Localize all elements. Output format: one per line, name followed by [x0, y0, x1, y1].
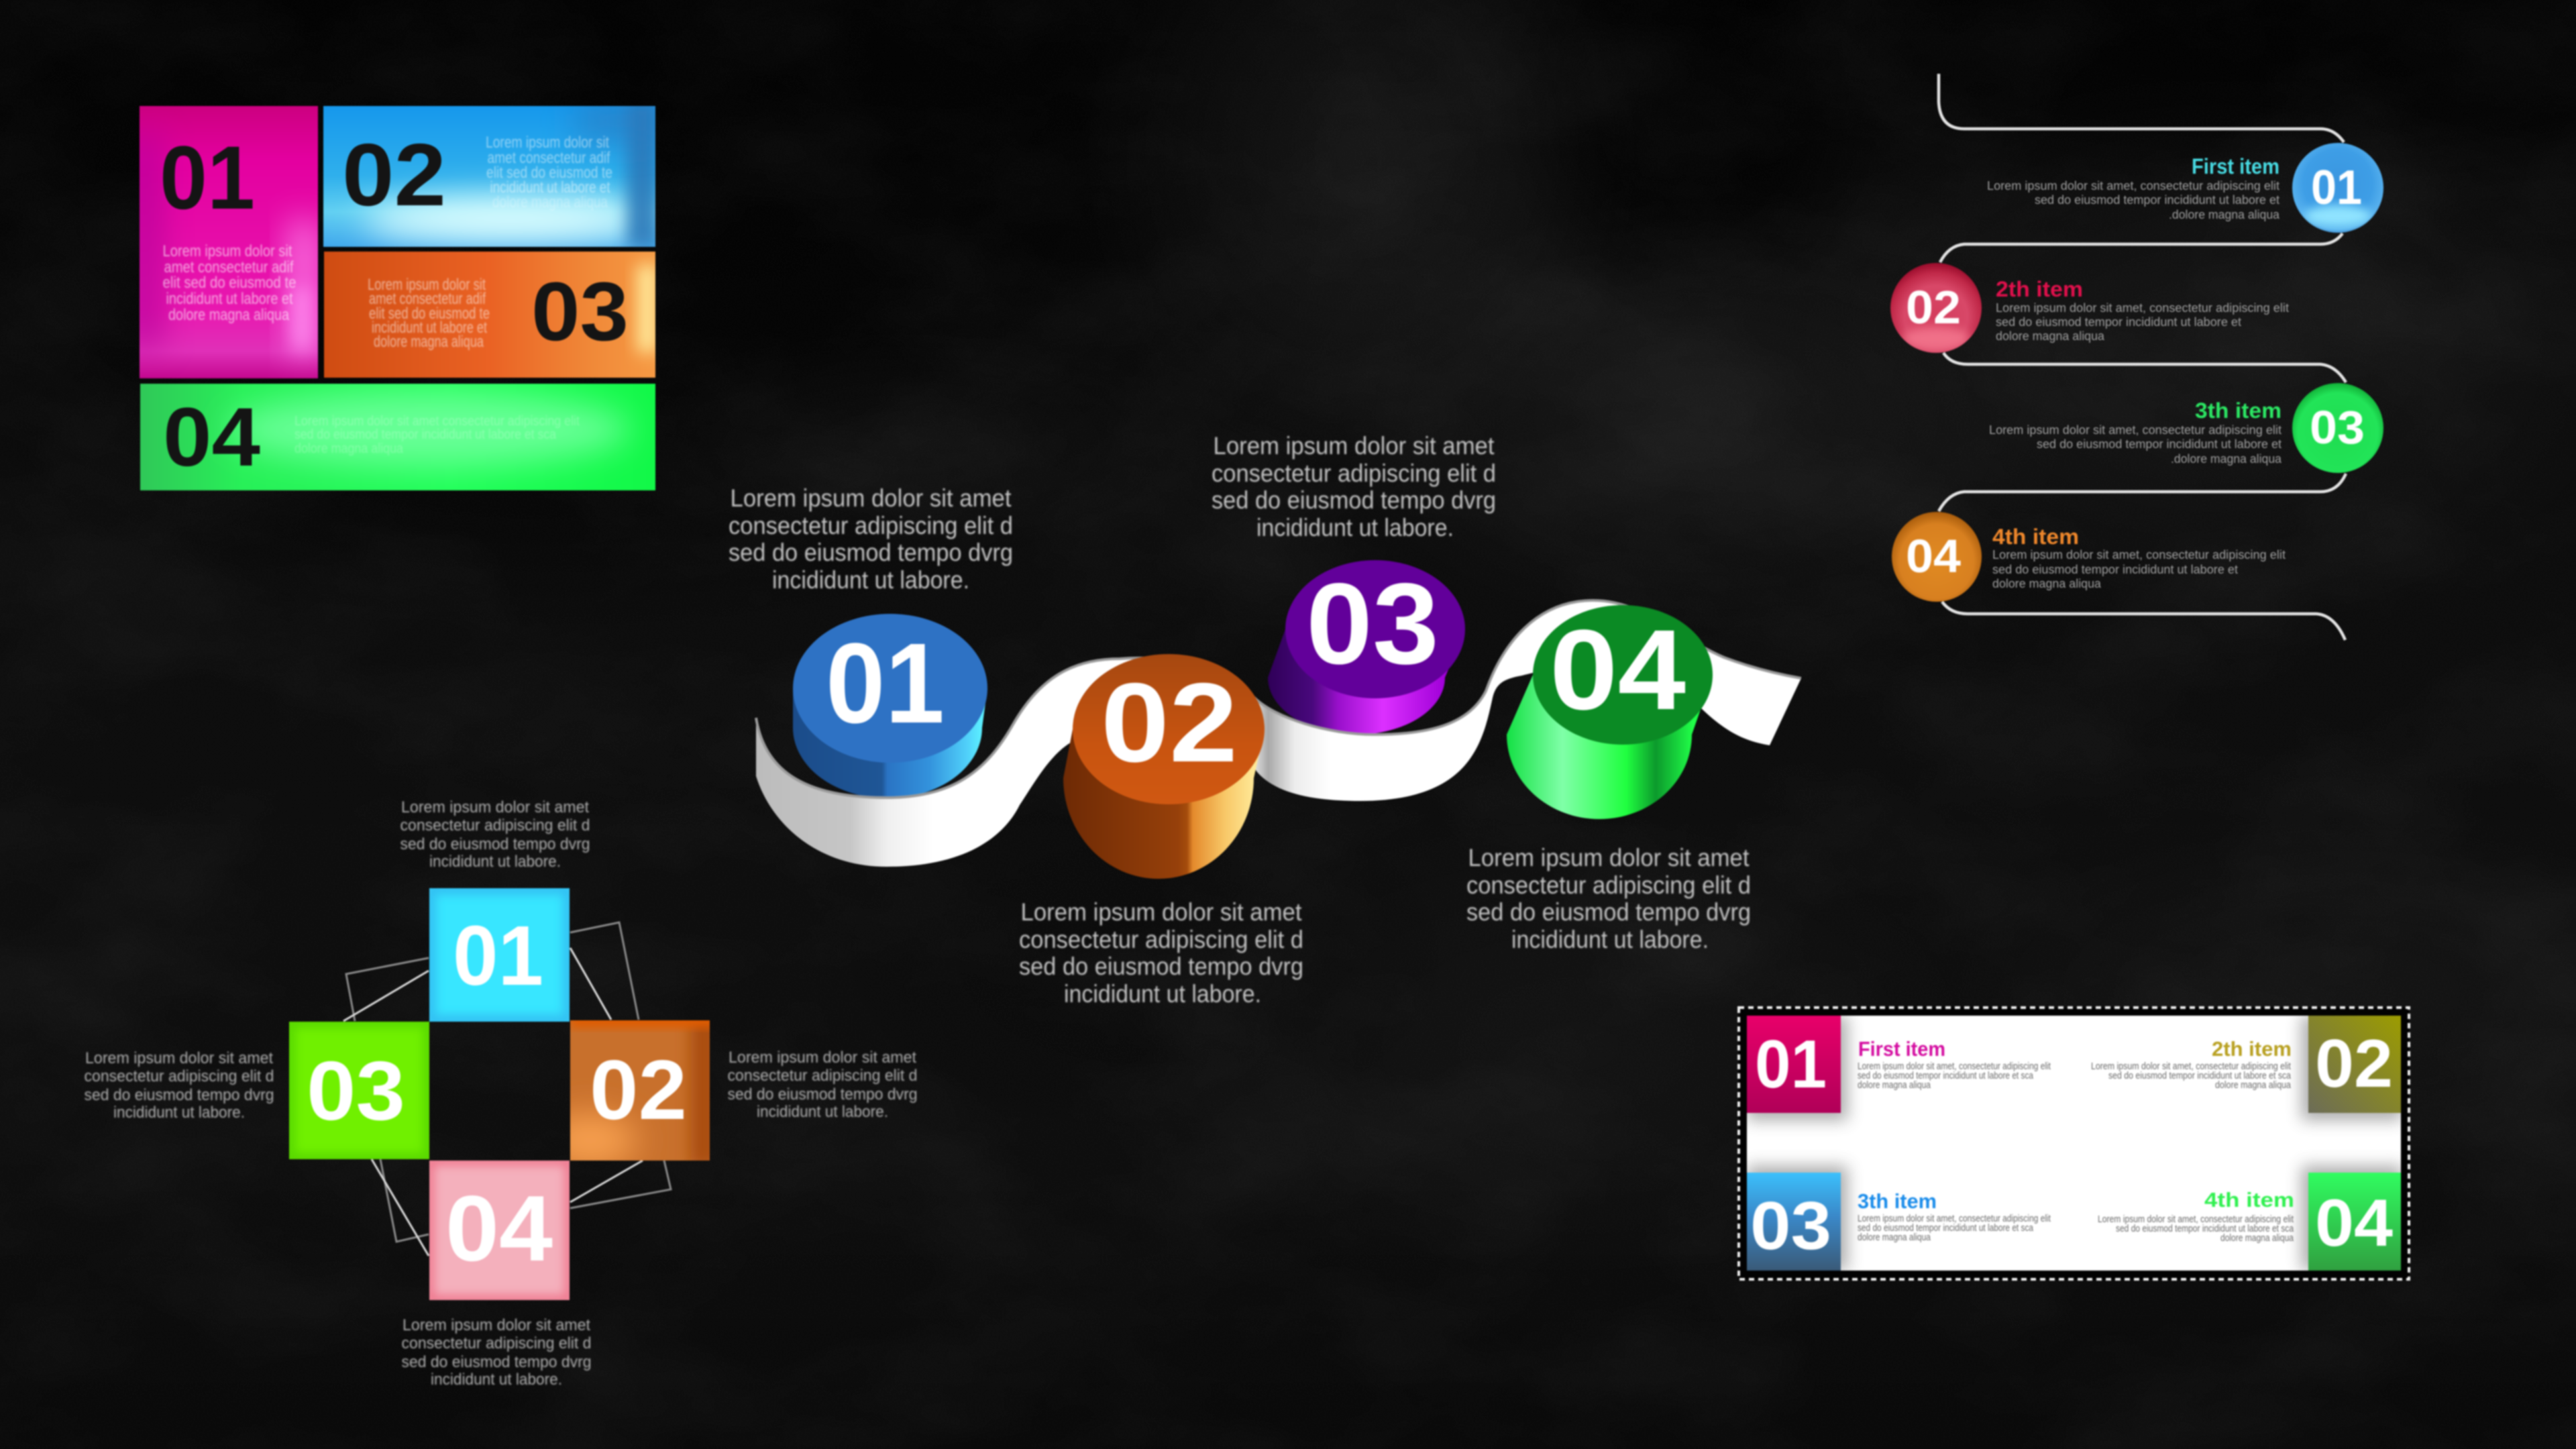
card text: second item: Lorem ipsum dolor sit amet, consectetur adipiscing elit — [2091, 1061, 2291, 1072]
block 02 blue — [323, 101, 657, 248]
dashed frame — [1739, 1008, 2409, 1279]
block 03 orange: amet consectetur adif — [369, 290, 486, 308]
cylinder 04 — [1507, 605, 1713, 819]
item 04: 4th item — [1992, 525, 2079, 549]
text below cylinder 04: incididunt ut labore. — [1511, 926, 1709, 953]
block 04 green — [140, 384, 655, 490]
text top: incididunt ut labore. — [429, 853, 561, 871]
tab 02 — [2308, 1016, 2401, 1113]
item 03: 3th item — [2195, 398, 2282, 423]
text right: sed do eiusmod tempo dvrg — [727, 1085, 918, 1104]
text above cylinder 01: Lorem ipsum dolor sit amet — [730, 484, 1012, 512]
card text: fourth item: dolore magna aliqua — [2220, 1233, 2294, 1244]
cylinder 03 body — [1268, 629, 1465, 735]
text bottom: incididunt ut labore. — [431, 1371, 562, 1389]
block 02 blue: elit sed do eiusmod te — [486, 164, 612, 182]
text right: Lorem ipsum dolor sit amet — [729, 1049, 916, 1067]
text above cylinder 01: incididunt ut labore. — [772, 566, 969, 594]
text above cylinder 03: incididunt ut labore. — [1256, 514, 1454, 541]
card text: second item: 2th item — [2212, 1037, 2292, 1061]
card text: first item — [1858, 1037, 2051, 1091]
text bottom: Lorem ipsum dolor sit amet — [402, 1316, 590, 1334]
text left: Lorem ipsum dolor sit amet — [85, 1049, 273, 1067]
card text: first item: sed do eiusmod tempor incididunt ut labore et sca — [1858, 1071, 2034, 1081]
item 04: 04 — [1906, 530, 1961, 582]
text above cylinder 03 — [1212, 432, 1496, 541]
square 01 cyan — [429, 888, 570, 1022]
item 03: 03 — [2310, 401, 2365, 453]
cylinder 03 top — [1285, 559, 1465, 698]
card text: first item: dolore magna aliqua — [1858, 1080, 1931, 1091]
cylinder 01 top: 01 — [826, 620, 945, 747]
tab 01 — [1747, 1016, 1841, 1113]
square 03 green: 03 — [307, 1044, 405, 1138]
block 02 blue: Lorem ipsum dolor sit — [486, 133, 609, 152]
block 01 magenta: dolore magna aliqua — [168, 306, 290, 324]
card text: third item: 3th item — [1858, 1189, 1937, 1213]
card text: third item: dolore magna aliqua — [1858, 1232, 1931, 1243]
item 03: sed do eiusmod tempor incididunt ut labore et — [2037, 437, 2282, 451]
item 02: 2th item — [1996, 277, 2083, 301]
block 01 magenta: 01 — [160, 128, 255, 228]
square 04 pink: 04 — [445, 1177, 553, 1281]
card text: second item: sed do eiusmod tempor incididunt ut labore et sca — [2108, 1071, 2292, 1081]
text below cylinder 02: sed do eiusmod tempo dvrg — [1019, 953, 1303, 980]
text above cylinder 03: Lorem ipsum dolor sit amet — [1213, 432, 1495, 460]
item 04: sed do eiusmod tempor incididunt ut labore et — [1992, 562, 2238, 576]
text below cylinder 02: consectetur adipiscing elit d — [1019, 926, 1303, 953]
item 01: Lorem ipsum dolor sit amet, consectetur adipiscing elit — [1987, 178, 2279, 193]
block 02 blue: 02 — [342, 125, 446, 224]
text below cylinder 04 — [1466, 844, 1751, 953]
block 03 orange: dolore magna aliqua — [374, 333, 484, 351]
block 01 magenta: incididunt ut labore et — [166, 290, 293, 308]
white ribbon — [756, 600, 1801, 867]
cylinder 03 top: 03 — [1306, 559, 1439, 688]
panel: ribbon with cylinders — [729, 432, 1801, 1008]
tab shadows — [1747, 1016, 2402, 1271]
block 01 magenta — [127, 106, 318, 378]
square 03 green — [289, 1022, 429, 1159]
cylinder 04: 04 — [1550, 606, 1686, 734]
text below cylinder 04: consectetur adipiscing elit d — [1466, 871, 1751, 899]
text left: sed do eiusmod tempo dvrg — [85, 1086, 274, 1104]
block 02 blue: amet consectetur adif — [487, 149, 610, 167]
item 03: Lorem ipsum dolor sit amet, consectetur adipiscing elit — [1989, 423, 2282, 437]
card text: first item: First item — [1858, 1037, 1945, 1061]
block 04 green: 04 — [163, 391, 260, 484]
item 02: sed do eiusmod tempor incididunt ut labore et — [1996, 315, 2241, 329]
text below cylinder 04: sed do eiusmod tempo dvrg — [1466, 898, 1751, 926]
card text: third item: Lorem ipsum dolor sit amet, consectetur adipiscing elit — [1858, 1214, 2051, 1224]
item 03 — [1989, 383, 2383, 473]
tab 03 — [1747, 1173, 1841, 1271]
tab 04 — [2308, 1173, 2401, 1271]
card text: fourth item — [2098, 1188, 2294, 1244]
block 03 orange: 03 — [531, 266, 629, 358]
text top: sed do eiusmod tempo dvrg — [400, 835, 590, 853]
item 01 — [1987, 143, 2383, 233]
block 01 magenta: Lorem ipsum dolor sit — [162, 242, 292, 260]
item 01: 01 — [2311, 161, 2362, 215]
square 02 orange — [543, 1013, 718, 1167]
text left: incididunt ut labore. — [113, 1104, 245, 1122]
card text: third item: sed do eiusmod tempor incididunt ut labore et sca — [1858, 1223, 2034, 1234]
text below cylinder 02: incididunt ut labore. — [1064, 980, 1261, 1008]
item 04: dolore magna aliqua — [1992, 576, 2102, 590]
tab 01: 01 — [1755, 1027, 1827, 1102]
text right: incididunt ut labore. — [757, 1103, 888, 1121]
block 04 green: sed do eiusmod tempor incididunt ut labore et sca — [294, 427, 557, 442]
item 01: .dolore magna aliqua — [2169, 207, 2280, 221]
text bottom: consectetur adipiscing elit d — [401, 1334, 592, 1352]
card text: second item: dolore magna aliqua — [2215, 1080, 2292, 1091]
item 04: Lorem ipsum dolor sit amet, consectetur adipiscing elit — [1992, 547, 2286, 561]
text top: consectetur adipiscing elit d — [400, 816, 590, 835]
panel: white card with corner tabs bottom right — [1739, 1008, 2409, 1279]
panel: coloured blocks top left — [127, 101, 657, 490]
item 02 — [1890, 263, 2289, 353]
text top: Lorem ipsum dolor sit amet — [401, 798, 589, 816]
item 01: First item — [2192, 154, 2279, 178]
tab 03: 03 — [1750, 1189, 1831, 1264]
text above cylinder 03: sed do eiusmod tempo dvrg — [1212, 486, 1496, 514]
text below cylinder 04: Lorem ipsum dolor sit amet — [1468, 844, 1750, 871]
text right — [727, 1049, 918, 1121]
text below cylinder 02 — [1019, 898, 1303, 1008]
square 01 cyan: 01 — [453, 908, 543, 1003]
text bottom — [401, 1316, 592, 1389]
text left — [85, 1049, 274, 1122]
cylinder 01 top — [793, 614, 987, 763]
item 02: dolore magna aliqua — [1996, 329, 2105, 343]
text above cylinder 01 — [729, 484, 1013, 594]
tab 02: 02 — [2315, 1026, 2393, 1102]
item 04 — [1892, 512, 2286, 602]
text right: consectetur adipiscing elit d — [727, 1067, 918, 1085]
card text: fourth item: Lorem ipsum dolor sit amet, consectetur adipiscing elit — [2098, 1214, 2294, 1225]
text below cylinder 02: Lorem ipsum dolor sit amet — [1021, 898, 1302, 926]
item 03: .dolore magna aliqua — [2171, 451, 2282, 466]
block 02 blue: dolore magna aliqua — [492, 193, 608, 211]
block 04 green: dolore magna aliqua — [294, 441, 404, 456]
block 03 orange: elit sed do eiusmod te — [369, 305, 490, 323]
card text: fourth item: 4th item — [2204, 1188, 2294, 1212]
panel: cross of squares bottom left — [85, 798, 918, 1389]
text top — [400, 798, 590, 871]
square 04 pink — [429, 1161, 570, 1300]
text above cylinder 01: sed do eiusmod tempo dvrg — [729, 539, 1013, 566]
connecting white line — [1939, 74, 2346, 640]
text above cylinder 03: consectetur adipiscing elit d — [1212, 460, 1496, 487]
cylinder 01 body — [793, 688, 987, 798]
square 02 orange: 02 — [590, 1042, 687, 1137]
block 03 orange: incididunt ut labore et — [372, 319, 487, 337]
item 02: 02 — [1906, 281, 1961, 333]
white card — [1747, 1016, 2401, 1271]
block 02 blue: incididunt ut labore et — [490, 178, 610, 197]
tab 04: 04 — [2315, 1185, 2393, 1260]
card text: fourth item: sed do eiusmod tempor incididunt ut labore et sca — [2116, 1224, 2294, 1234]
item 01: sed do eiusmod tempor incididunt ut labore et — [2035, 193, 2279, 207]
block 03 orange: Lorem ipsum dolor sit — [368, 276, 486, 294]
block 04 green: Lorem ipsum dolor sit amet consectetur adipiscing elit — [294, 414, 580, 429]
card text: second item — [2091, 1037, 2292, 1091]
text bottom: sed do eiusmod tempo dvrg — [401, 1353, 592, 1371]
card text: third item — [1858, 1189, 2051, 1243]
text above cylinder 01: consectetur adipiscing elit d — [729, 512, 1013, 539]
panel: serpentine timeline top right — [1890, 74, 2383, 640]
block 01 magenta: amet consectetur adif — [164, 258, 294, 276]
rotated outlines behind squares — [343, 922, 671, 1256]
text left: consectetur adipiscing elit d — [85, 1067, 274, 1085]
block 01 magenta: elit sed do eiusmod te — [162, 274, 297, 292]
card text: first item: Lorem ipsum dolor sit amet, consectetur adipiscing elit — [1858, 1061, 2051, 1072]
cylinder 02: 02 — [1101, 659, 1238, 786]
item 02: Lorem ipsum dolor sit amet, consectetur adipiscing elit — [1996, 301, 2289, 315]
block 03 orange — [324, 252, 657, 378]
cylinder 02 — [1063, 654, 1265, 879]
